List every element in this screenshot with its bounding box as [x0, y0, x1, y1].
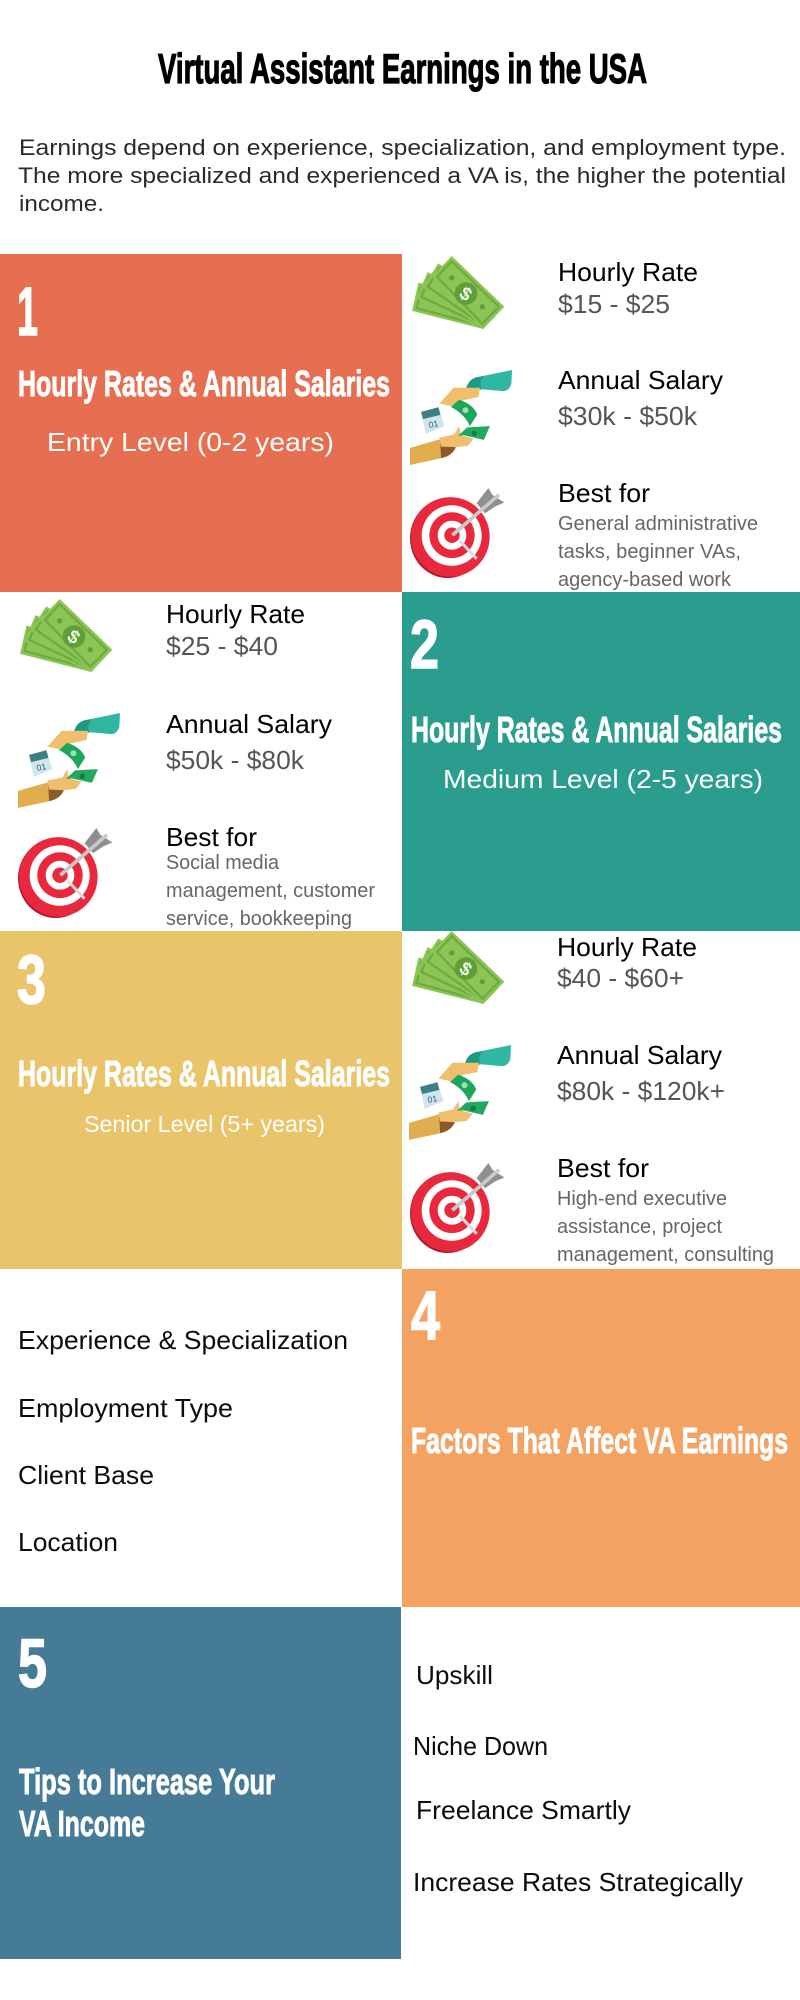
- number 5: 5: [18, 1625, 47, 1702]
- hourly rate medium: [166, 599, 305, 661]
- annual salary senior: Annual Salary: [557, 1040, 722, 1070]
- annual salary medium: $50k - $80k: [166, 745, 305, 775]
- icon: money exchange: [410, 370, 512, 465]
- best for senior: management, consulting: [557, 1244, 774, 1266]
- heading: tips to increase your va income: VA Income: [19, 1803, 145, 1844]
- hourly rate entry: Hourly Rate: [558, 257, 698, 287]
- best for entry: General administrative: [558, 513, 758, 535]
- best for entry: tasks, beginner VAs,: [558, 541, 741, 563]
- heading: hourly rates and annual salaries: Hourly Rates & Annual Salaries: [18, 1053, 390, 1094]
- best for medium: service, bookkeeping: [166, 908, 352, 930]
- number 3: 3: [17, 941, 46, 1018]
- panel: senior level: [0, 931, 402, 1269]
- best for senior: [557, 1153, 774, 1266]
- best for medium: Social media: [166, 852, 280, 874]
- entry level label: Entry Level (0-2 years): [47, 427, 334, 457]
- hourly rate medium: $25 - $40: [166, 631, 278, 661]
- details: medium level: [9, 596, 375, 930]
- annual salary entry: [558, 365, 723, 431]
- best for medium: management, customer: [166, 880, 375, 902]
- tips list: [413, 1660, 743, 1897]
- hourly rate entry: [558, 257, 698, 319]
- icon: target: [18, 828, 112, 918]
- best for entry: Best for: [558, 478, 650, 508]
- number 1: 1: [17, 273, 38, 350]
- icon: target: [410, 1163, 504, 1253]
- factors list: Client Base: [18, 1460, 154, 1490]
- factors list: [18, 1325, 348, 1557]
- icon: money: [401, 253, 504, 355]
- factors list: Employment Type: [18, 1393, 233, 1423]
- intro paragraph: income.: [19, 191, 104, 216]
- heading: tips to increase your va income: Tips to Increase Your: [19, 1761, 275, 1802]
- annual salary entry: Annual Salary: [558, 365, 723, 395]
- annual salary senior: $80k - $120k+: [557, 1076, 725, 1106]
- panel: tips: [0, 1607, 401, 1959]
- best for senior: High-end executive: [557, 1188, 727, 1210]
- details: entry level: [401, 253, 758, 591]
- details: senior level: [401, 928, 774, 1266]
- panel: medium level: [402, 592, 800, 931]
- tips list: Increase Rates Strategically: [413, 1867, 743, 1897]
- number 4: 4: [411, 1277, 440, 1354]
- heading: tips to increase your va income: [19, 1761, 275, 1844]
- icon: money: [401, 928, 504, 1030]
- best for entry: [558, 478, 758, 591]
- medium level label: Medium Level (2-5 years): [443, 764, 763, 794]
- number 2: 2: [410, 606, 439, 683]
- icon: money: [9, 596, 112, 698]
- tips list: Niche Down: [413, 1731, 548, 1761]
- tips list: Upskill: [416, 1660, 493, 1690]
- hourly rate medium: Hourly Rate: [166, 599, 305, 629]
- best for senior: assistance, project: [557, 1216, 722, 1238]
- factors list: Experience & Specialization: [18, 1325, 348, 1355]
- intro paragraph: Earnings depend on experience, specialization, and employment type.: [19, 135, 786, 160]
- annual salary medium: [166, 709, 332, 775]
- factors list: Location: [18, 1527, 118, 1557]
- senior level label: Senior Level (5+ years): [84, 1111, 325, 1137]
- hourly rate senior: Hourly Rate: [557, 932, 697, 962]
- best for entry: agency-based work: [558, 569, 732, 591]
- hourly rate senior: [557, 932, 697, 993]
- annual salary senior: [557, 1040, 725, 1106]
- annual salary medium: Annual Salary: [166, 709, 332, 739]
- hourly rate senior: $40 - $60+: [557, 963, 684, 993]
- intro paragraph: The more specialized and experienced a VA is, the higher the potential: [18, 163, 786, 188]
- intro paragraph: [18, 135, 786, 216]
- best for medium: Best for: [166, 822, 257, 852]
- heading: hourly rates and annual salaries: Hourly Rates & Annual Salaries: [18, 363, 390, 404]
- best for medium: [166, 822, 375, 930]
- hourly rate entry: $15 - $25: [558, 289, 670, 319]
- icon: money exchange: [18, 713, 120, 808]
- icon: target: [410, 488, 504, 578]
- panel: entry level: [0, 254, 402, 592]
- icon: money exchange: [409, 1045, 511, 1140]
- best for senior: Best for: [557, 1153, 649, 1183]
- tips list: Freelance Smartly: [416, 1795, 631, 1825]
- panel: factors: [402, 1269, 800, 1607]
- annual salary entry: $30k - $50k: [558, 401, 698, 431]
